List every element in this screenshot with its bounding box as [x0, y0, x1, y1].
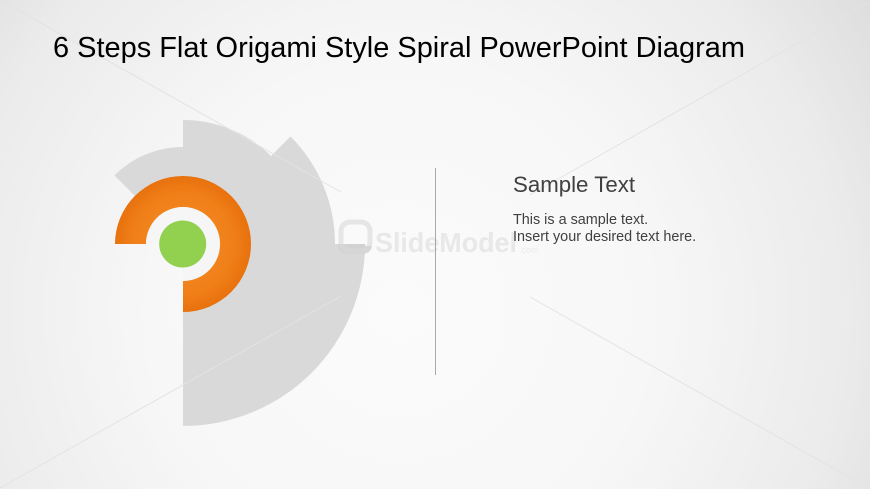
gray segment: step 5 [183, 136, 335, 244]
gray segment: step 4 [183, 120, 271, 244]
gray segment: step 3 [114, 147, 183, 244]
orange ring segment [115, 176, 251, 312]
green center circle [159, 220, 206, 268]
heading: sample text: Sample Text [513, 172, 635, 197]
text block [513, 172, 696, 245]
body text [513, 212, 696, 245]
body text: Insert your desired text here. [513, 229, 696, 245]
body text: This is a sample text. [513, 212, 648, 228]
watermark: .com [519, 245, 539, 255]
inner light circle gap [146, 207, 220, 281]
spiral diagram [114, 120, 365, 426]
title: 6 Steps Flat Origami Style Spiral PowerPoint Diagram [53, 32, 745, 64]
watermark: SlideModel [375, 227, 517, 258]
vertical divider [434, 168, 436, 375]
watermark [338, 222, 539, 258]
gray segment: step 6 [183, 244, 365, 426]
